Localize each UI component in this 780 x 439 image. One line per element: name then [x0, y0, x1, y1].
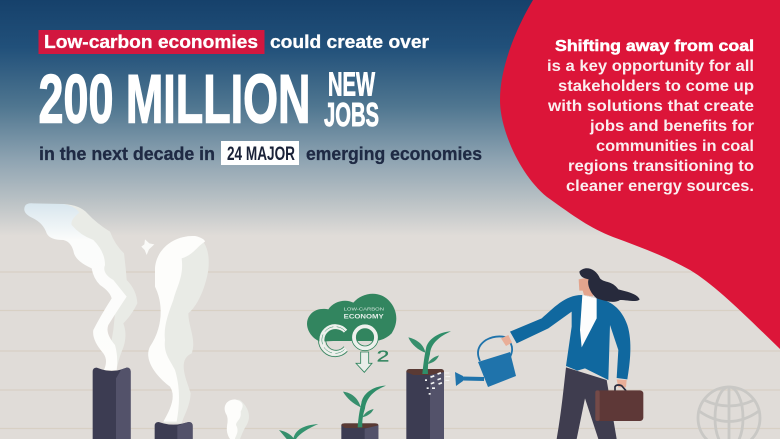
- plant 3: [408, 331, 451, 374]
- label: 24 major: [221, 141, 299, 165]
- callout text: Shifting away from coal: [555, 38, 754, 55]
- callout text: [547, 38, 754, 195]
- CO2 icon: 2: [377, 348, 389, 365]
- jacket: [510, 295, 630, 380]
- smoke 2: [148, 236, 209, 423]
- CO2 icon: ECONOMY: [344, 313, 384, 320]
- hand 2: [617, 379, 627, 387]
- smoke 3: [225, 399, 249, 439]
- red panel: [500, 0, 780, 349]
- callout text: jobs and benefits for: [589, 118, 754, 135]
- pot 4: [406, 369, 444, 439]
- smoke and chimneys: [24, 203, 249, 439]
- callout text: with solutions that create: [547, 98, 754, 115]
- plant 2: [343, 386, 386, 427]
- text: in the next decade in: in the next decade in: [39, 144, 215, 164]
- chimney 1: [93, 368, 131, 439]
- label: low-carbon economies: Low-carbon economies: [44, 32, 258, 52]
- hand: [501, 335, 512, 346]
- smoke puff small: [141, 239, 154, 255]
- plant 1: [279, 424, 318, 439]
- woman: [501, 268, 643, 439]
- CO2 icon: [307, 294, 396, 372]
- callout text: is a key opportunity for all: [547, 58, 754, 75]
- callout text: cleaner energy sources.: [566, 178, 754, 195]
- callout text: communities in coal: [596, 138, 754, 155]
- watering can: [455, 336, 516, 387]
- water drops: [425, 372, 450, 395]
- briefcase: [595, 385, 643, 421]
- chimney 2: [155, 422, 193, 439]
- face: [579, 277, 593, 297]
- icon label: LOW-CARBON: [344, 307, 384, 313]
- sky background: [0, 0, 780, 236]
- pot 3: [341, 423, 378, 439]
- label: 24 major: 24 MAJOR: [227, 143, 295, 165]
- callout text: stakeholders to come up: [558, 78, 754, 95]
- hair: [579, 268, 640, 302]
- callout text: regions transitioning to: [568, 158, 754, 175]
- text: emerging economies: emerging economies: [306, 144, 482, 164]
- trousers: [557, 367, 617, 439]
- globe logo: [698, 387, 760, 439]
- headline: [38, 30, 482, 165]
- text: could create over: could create over: [270, 32, 429, 52]
- text: new: NEW: [328, 66, 376, 102]
- plants and pots: [279, 294, 451, 439]
- shirt: [580, 295, 597, 347]
- text: jobs: JOBS: [324, 96, 379, 133]
- smoke 1: [24, 203, 137, 370]
- big number: 200 million: 200 MILLION: [38, 60, 310, 138]
